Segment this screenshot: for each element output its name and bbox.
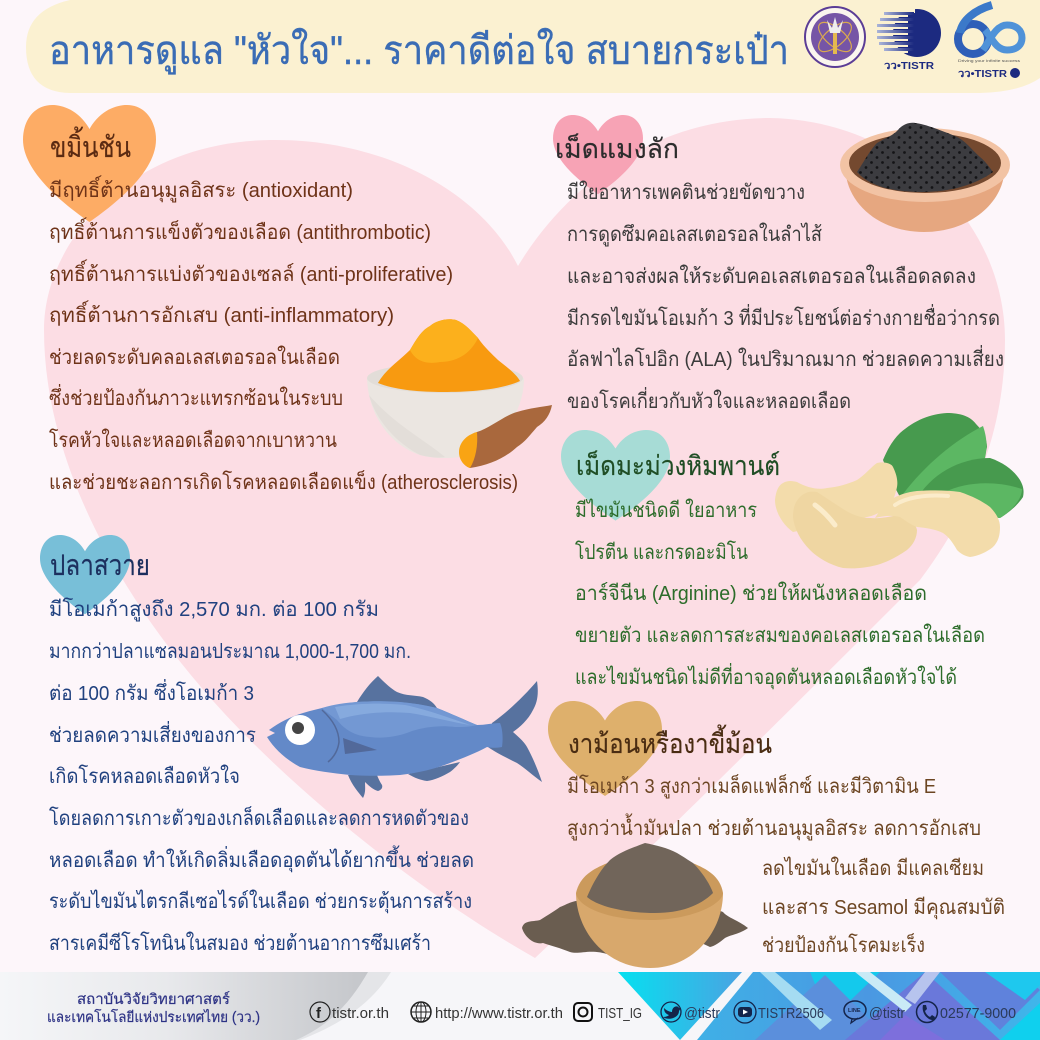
contact: line: LINE bbox=[848, 1008, 861, 1014]
contact: twitter bbox=[661, 1002, 720, 1022]
text block: fish: ระดับไขมันไตรกลีเซอไรด์ในเลือด ช่วยกระตุ้นการสร้าง bbox=[49, 889, 472, 914]
panel: sesame bbox=[522, 701, 1005, 968]
text block: fish: โดยลดการเกาะตัวของเกล็ดเลือดและลดการหดตัวของ bbox=[49, 804, 469, 830]
text block: basil seeds: และอาจส่งผลให้ระดับคอเลสเตอรอลในเลือดลดลง bbox=[567, 264, 976, 288]
heart badge: cashew bbox=[561, 430, 670, 521]
text block: turmeric: และช่วยชะลอการเกิดโรคหลอดเลือดแข็ง (atherosclerosis) bbox=[49, 468, 518, 494]
panel: basil seeds bbox=[553, 115, 1010, 413]
logo: 60th anniversary: วว•TISTR bbox=[958, 69, 1008, 80]
heart badge: turmeric bbox=[23, 105, 156, 222]
heart badge: basil seeds bbox=[553, 115, 643, 194]
text block: turmeric bbox=[49, 175, 518, 494]
contact: line bbox=[844, 1001, 905, 1023]
panel: turmeric bbox=[23, 105, 552, 494]
organisation name: และเทคโนโลยีแห่งประเทศไทย (วว.) bbox=[47, 1008, 260, 1026]
logo: TISTR sphere: วว•TISTR bbox=[884, 61, 935, 72]
text block: sesame: ลดไขมันในเลือด มีแคลเซียม bbox=[762, 856, 984, 880]
text block: sesame bbox=[567, 772, 1005, 957]
text block: sesame: มีโอเมก้า 3 สูงกว่าเมล็ดแฟล็กซ์ และมีวิตามิน E bbox=[567, 772, 936, 799]
text block: basil seeds: อัลฟาไลโปอิก (ALA) ในปริมาณมาก ช่วยลดความเสี่ยง bbox=[567, 345, 1004, 371]
contact: youtube: TISTR2506 bbox=[758, 1005, 824, 1022]
text block: cashew: ขยายตัว และลดการสะสมของคอเลสเตอรอลในเลือด bbox=[575, 623, 985, 647]
header banner bbox=[26, 0, 1040, 93]
text block: fish bbox=[49, 597, 474, 955]
icon: fish bbox=[267, 676, 542, 798]
text block: basil seeds: มีกรดไขมันโอเมก้า 3 ที่มีประโยชน์ต่อร่างกายชื่อว่ากรด bbox=[567, 304, 1000, 330]
text block: turmeric: โรคหัวใจและหลอดเลือดจากเบาหวาน bbox=[49, 428, 337, 452]
contact: telephone: 02577-9000 bbox=[940, 1005, 1016, 1022]
icon: turmeric bowl bbox=[367, 319, 552, 468]
heading: fish: ปลาสวาย bbox=[50, 550, 150, 582]
text block: turmeric: ฤทธิ์ต้านการอักเสบ (anti-inflammatory) bbox=[49, 300, 394, 327]
text block: fish: ช่วยลดความเสี่ยงของการ bbox=[49, 721, 256, 747]
icon: cashews and leaves bbox=[775, 413, 1024, 568]
text block: fish: ต่อ 100 กรัม ซึ่งโอเมก้า 3 bbox=[49, 679, 254, 705]
text block: turmeric: มีฤทธิ์ต้านอนุมูลอิสระ (antioxidant) bbox=[49, 175, 353, 203]
heading: basil seeds: เม็ดแมงลัก bbox=[555, 131, 679, 164]
text block: fish: สารเคมีซีโรโทนินในสมอง ช่วยต้านอาการซึมเศร้า bbox=[49, 931, 431, 955]
text block: basil seeds: มีใยอาหารเพคตินช่วยขัดขวาง bbox=[567, 180, 805, 204]
panel: striped catfish bbox=[40, 535, 542, 955]
text block: sesame: ช่วยป้องกันโรคมะเร็ง bbox=[762, 931, 925, 957]
text block: basil seeds: ของโรคเกี่ยวกับหัวใจและหลอดเลือด bbox=[567, 387, 851, 413]
text block: turmeric: ฤทธิ์ต้านการแบ่งตัวของเซลล์ (anti-proliferative) bbox=[49, 259, 453, 286]
icon: sesame bowl bbox=[522, 843, 748, 968]
contact: youtube bbox=[734, 1001, 824, 1023]
text block: turmeric: ช่วยลดระดับคลอเลสเตอรอลในเลือด bbox=[49, 345, 340, 369]
contact: website: http://www.tistr.or.th bbox=[435, 1005, 563, 1022]
logo: TISTR emblem bbox=[805, 7, 865, 67]
text block: turmeric: ซึ่งช่วยป้องกันภาวะแทรกซ้อนในระบบ bbox=[49, 384, 343, 410]
contact: facebook: tistr.or.th bbox=[332, 1005, 389, 1022]
contact: facebook bbox=[310, 1002, 389, 1022]
heading: cashew: เม็ดมะม่วงหิมพานต์ bbox=[576, 448, 780, 481]
heading: turmeric: ขมิ้นชัน bbox=[50, 126, 131, 164]
text block: cashew bbox=[575, 498, 985, 690]
text block: cashew: อาร์จีนีน (Arginine) ช่วยให้ผนังหลอดเลือด bbox=[575, 581, 927, 605]
heart badge: fish bbox=[40, 535, 130, 614]
footer grey shape bbox=[0, 972, 391, 1040]
text block: cashew: โปรตีน และกรดอะมิโน bbox=[575, 540, 748, 564]
logo: 60th anniversary bbox=[958, 5, 1022, 80]
text block: sesame: และสาร Sesamol มีคุณสมบัติ bbox=[762, 896, 1005, 920]
text block: fish: มีโอเมก้าสูงถึง 2,570 มก. ต่อ 100 กรัม bbox=[49, 597, 379, 622]
contact: instagram bbox=[574, 1003, 642, 1022]
text block: basil seeds bbox=[567, 180, 1004, 413]
contact: telephone bbox=[916, 1002, 1016, 1022]
panel: cashew nuts bbox=[561, 413, 1024, 690]
logo: TISTR sphere bbox=[875, 9, 941, 72]
logo: 60th anniversary: Driving your infinite success bbox=[958, 58, 1020, 63]
heart badge: sesame bbox=[548, 701, 662, 796]
text block: turmeric: ฤทธิ์ต้านการแข็งตัวของเลือด (antithrombotic) bbox=[49, 217, 431, 244]
heading: sesame: งาม้อนหรืองาขี้ม้อน bbox=[568, 724, 772, 759]
icon: basil seed bowl bbox=[840, 123, 1010, 232]
text block: fish: หลอดเลือด ทำให้เกิดลิ่มเลือดอุดตันได้ยากขึ้น ช่วยลด bbox=[49, 845, 474, 873]
text block: fish: เกิดโรคหลอดเลือดหัวใจ bbox=[49, 764, 240, 788]
large background heart bbox=[44, 118, 1005, 958]
contact: twitter: @tistr bbox=[684, 1005, 720, 1022]
text block: cashew: และไขมันชนิดไม่ดีที่อาจอุดตันหลอดเลือดหัวใจได้ bbox=[575, 663, 957, 690]
title: อาหารดูแล "หัวใจ"... ราคาดีต่อใจ สบายกระเป๋า bbox=[49, 27, 789, 74]
text block: fish: มากกว่าปลาแซลมอนประมาณ 1,000-1,700 มก. bbox=[49, 640, 411, 663]
text block: basil seeds: การดูดซึมคอเลสเตอรอลในลำไส้ bbox=[567, 222, 822, 247]
contact: instagram: TIST_IG bbox=[598, 1005, 642, 1022]
organisation name: สถาบันวิจัยวิทยาศาสตร์ bbox=[77, 991, 230, 1008]
text block: sesame: สูงกว่าน้ำมันปลา ช่วยต้านอนุมูลอิสระ ลดการอักเสบ bbox=[567, 813, 981, 841]
contact: line: @tistr bbox=[869, 1005, 905, 1022]
contact: facebook: f bbox=[316, 1005, 322, 1022]
organisation name bbox=[47, 991, 260, 1026]
text block: cashew: มีไขมันชนิดดี ใยอาหาร bbox=[575, 498, 757, 522]
footer blue pattern bbox=[618, 972, 1040, 1040]
footer bbox=[0, 972, 1040, 1040]
